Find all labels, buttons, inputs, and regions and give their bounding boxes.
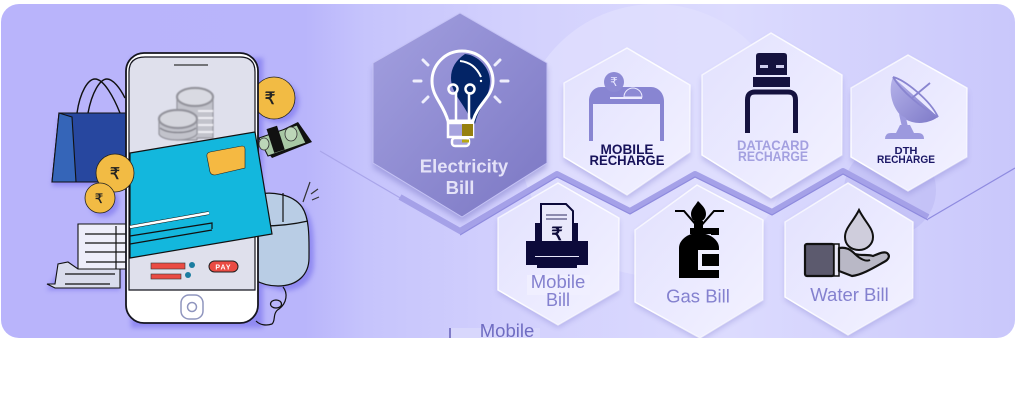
icon: home button bbox=[181, 295, 203, 319]
panel: gas bill bbox=[635, 185, 763, 341]
illustration: gold coin top right bbox=[253, 77, 295, 119]
illustration shadows bbox=[47, 58, 314, 328]
illustration: credit card bbox=[130, 132, 272, 258]
icon: light bulb bbox=[414, 51, 508, 146]
text: gas bill: Gas Bill bbox=[666, 286, 730, 306]
heading: bill: Bill bbox=[446, 177, 474, 198]
panel: datacard recharge bbox=[702, 33, 842, 202]
icon: pay button row bbox=[151, 261, 238, 279]
illustration: gold coins left: ₹ bbox=[95, 191, 103, 206]
text: mobile recharge line two: RECHARGE bbox=[590, 152, 664, 168]
text: mobile recharge line one: MOBILE bbox=[600, 141, 654, 157]
icon: hand holding water drop bbox=[805, 210, 889, 276]
text: datacard line two: RECHARGE bbox=[738, 148, 808, 164]
illustration: shopping bag bbox=[52, 79, 126, 182]
panel: mobile recharge bbox=[564, 48, 690, 199]
text: mobile bill: Bill bbox=[546, 290, 570, 310]
text: clipped mobile label: Mobile bbox=[480, 320, 534, 341]
icon: gas stove cylinder bbox=[675, 201, 724, 278]
icon: satellite dish bbox=[885, 77, 938, 139]
panel: mobile bill bbox=[498, 183, 619, 328]
icon: printer with bill: ₹ bbox=[551, 224, 563, 244]
illustration: gold coin top right: ₹ bbox=[265, 89, 275, 108]
text: clipped mobile label bbox=[449, 324, 534, 338]
text: dth line two: RECHARGE bbox=[877, 154, 935, 166]
panel: electricity bill bbox=[373, 13, 547, 222]
text: water bill: Water Bill bbox=[810, 284, 889, 305]
illustration: receipt bbox=[47, 224, 128, 288]
text: mobile bill bbox=[532, 274, 584, 306]
illustration: banknotes bbox=[259, 122, 312, 158]
heading: electricity bill: Electricity bbox=[420, 156, 509, 176]
icon: phone top with coins bbox=[589, 72, 664, 141]
illustration: gold coins left bbox=[85, 154, 134, 213]
icon: usb datacard bbox=[748, 53, 796, 133]
illustration: gold coins left: ₹ bbox=[110, 166, 120, 183]
illustration: phone bbox=[126, 53, 258, 323]
panel: dth recharge bbox=[851, 55, 967, 195]
zigzag ribbon behind hexagons bbox=[320, 151, 1015, 235]
icon: phone top with coins: ₹ bbox=[610, 75, 618, 89]
text: datacard line one: DATACARD bbox=[737, 137, 809, 153]
illustration: mouse bbox=[255, 182, 319, 325]
text: mobile bill: Mobile bbox=[531, 271, 585, 292]
panel: water bill bbox=[785, 183, 913, 338]
text: dth line one: DTH bbox=[894, 145, 918, 157]
icon: printer with bill bbox=[526, 204, 588, 268]
icon: coin stacks bbox=[159, 88, 213, 140]
icon: pay button row: PAY bbox=[215, 264, 232, 272]
